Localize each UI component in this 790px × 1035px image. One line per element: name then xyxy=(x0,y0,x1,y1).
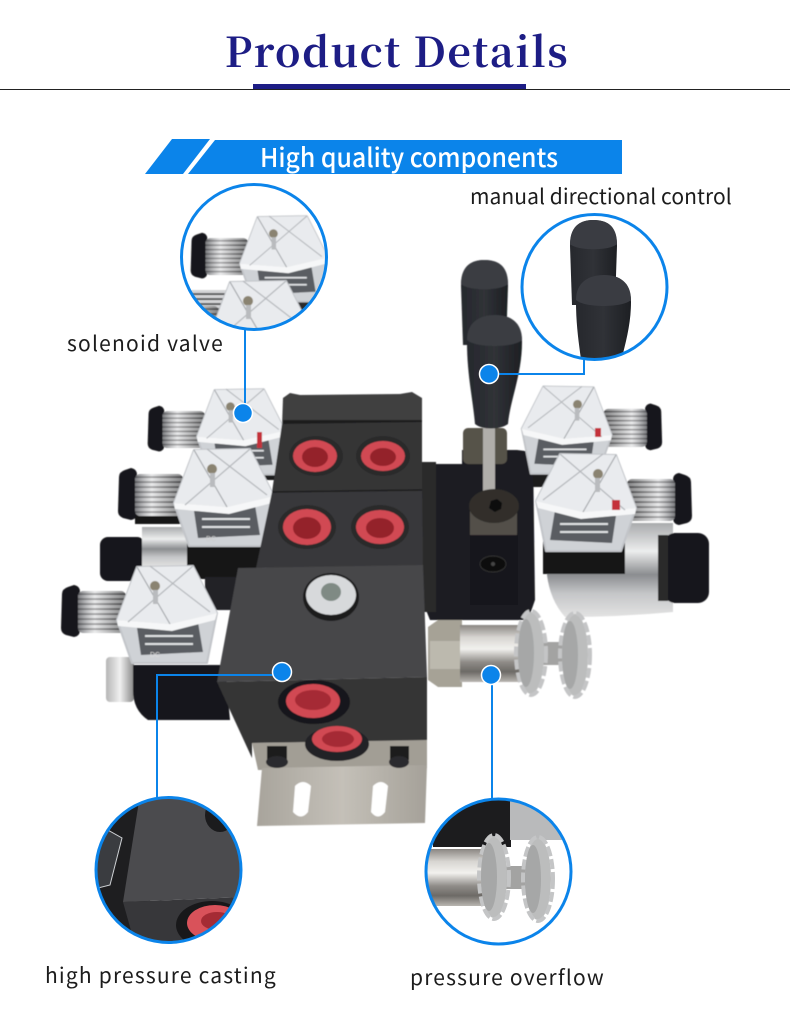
red ports xyxy=(278,436,410,724)
callout line: solenoid valve xyxy=(234,330,252,422)
top bolt xyxy=(303,573,359,621)
front left solenoid: DC xyxy=(150,652,160,659)
callout line: pressure overflow xyxy=(482,666,500,798)
left rear solenoids: DC xyxy=(206,536,216,543)
callout line: manual directional control xyxy=(480,360,584,384)
valve block stack xyxy=(217,392,427,758)
detail: manual directional control xyxy=(522,214,667,388)
detail: pressure overflow xyxy=(424,798,572,946)
detail: solenoid valve xyxy=(180,183,328,331)
zoomed block xyxy=(98,799,240,941)
zoomed connectors xyxy=(190,214,325,328)
right casting body xyxy=(420,450,535,620)
zoomed adjuster xyxy=(428,800,562,923)
left rear solenoids xyxy=(100,389,285,610)
mounting bracket xyxy=(252,726,427,826)
pressure overflow adjuster xyxy=(428,611,590,697)
detail: high pressure casting xyxy=(90,795,248,949)
product photo: hydraulic valve illustration xyxy=(61,260,709,826)
title rule xyxy=(0,84,790,90)
banner: high quality components xyxy=(145,138,622,175)
banner: high quality components: High quality components xyxy=(260,138,558,175)
label: high pressure casting: high pressure casting xyxy=(45,960,277,990)
control handles xyxy=(461,260,522,428)
right solenoid connectors xyxy=(522,386,692,551)
label: solenoid valve: solenoid valve xyxy=(67,328,224,358)
front left solenoid xyxy=(61,566,230,720)
zoomed handles xyxy=(570,220,631,358)
label: manual directional control: manual directional control xyxy=(470,181,733,211)
control lever stem and collar xyxy=(463,425,519,535)
right rear solenoid xyxy=(530,437,709,617)
label: pressure overflow: pressure overflow xyxy=(410,962,605,992)
callout line: high pressure casting xyxy=(157,662,292,797)
title: Product Details xyxy=(225,20,569,79)
